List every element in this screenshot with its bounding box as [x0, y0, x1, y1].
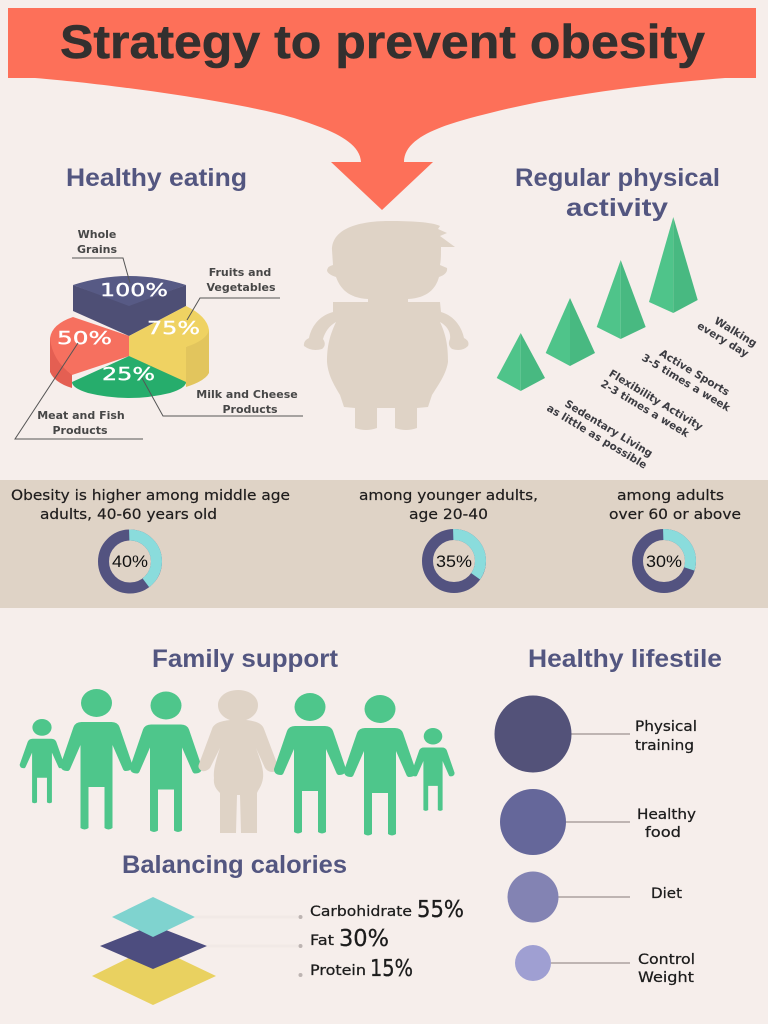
pyramid chart: physical activity	[497, 217, 759, 472]
donut: 40%: 40%	[112, 552, 148, 571]
banner arrow	[8, 8, 756, 210]
leader lines	[15, 258, 303, 439]
layered diamonds	[92, 897, 302, 1005]
label: active sports: Active Sports	[657, 347, 731, 399]
layer: protein	[92, 946, 216, 1005]
heading: healthy lifestile: Healthy lifestile	[528, 645, 722, 673]
pie value labels	[57, 280, 200, 385]
slice: meat and fish 50%	[50, 317, 129, 388]
label: sedentary living: as little as possible	[544, 402, 649, 472]
legend: fat: Fat	[310, 933, 335, 949]
heading: family support: Family support	[152, 645, 339, 673]
item: control weight: Control	[638, 952, 695, 968]
text: younger adults: among younger adults,	[359, 488, 538, 504]
heading: regular physical activity: activity	[566, 194, 668, 222]
label: meat and fish: Meat and Fish	[37, 409, 125, 422]
lifestyle chart	[494, 696, 697, 986]
figure: child left	[20, 719, 64, 803]
figure: overweight person	[198, 690, 278, 833]
heading: regular physical activity: Regular physical	[515, 164, 720, 192]
item: control weight	[515, 945, 695, 986]
text: middle age: adults, 40-60 years old	[40, 507, 217, 523]
label: flexibility activity: Flexibility Activity	[607, 368, 705, 433]
label: meat and fish: Products	[52, 424, 108, 437]
title: Strategy to prevent obesity	[60, 15, 705, 68]
label: milk and cheese: Products	[222, 403, 278, 416]
item: diet	[508, 872, 682, 922]
label: flexibility activity: 2-3 times a week	[598, 378, 692, 441]
pyramid: walking	[649, 217, 698, 313]
donut: 30%: 30%	[646, 552, 682, 571]
label: fruits and vegetables: Vegetables	[206, 281, 276, 294]
text: younger adults: age 20-40	[409, 507, 488, 523]
pie value labels: 50%	[57, 328, 112, 349]
band: age statistics	[0, 480, 768, 608]
donut: 35%: 35%	[436, 552, 472, 571]
donut: 40%	[104, 535, 156, 588]
figure: child right	[411, 728, 455, 811]
donut: 35%	[428, 534, 480, 588]
label: walking: Walking	[712, 315, 759, 350]
item: healthy food: food	[645, 825, 681, 841]
heading: healthy eating: Healthy eating	[66, 164, 247, 192]
heading: balancing calories: Balancing calories	[122, 851, 347, 879]
figure: adult 2	[130, 692, 202, 832]
slice: milk and cheese 25%	[72, 356, 186, 398]
item: physical training	[494, 696, 697, 772]
family illustration	[20, 689, 455, 836]
label: whole grains: Grains	[77, 243, 117, 256]
bullet dots	[298, 915, 302, 977]
layer: carbohydrate	[112, 897, 195, 937]
slice: fruits and vegetables 75%	[129, 306, 209, 387]
label: whole grains: Whole	[78, 228, 116, 241]
pie chart: healthy eating	[15, 228, 303, 439]
text: over 60: over 60 or above	[609, 507, 741, 523]
legend: protein: Protein	[310, 963, 366, 979]
figure: adult 4	[344, 695, 416, 836]
item: healthy food	[500, 789, 696, 855]
calorie legend	[310, 897, 464, 982]
text: over 60: among adults	[617, 488, 724, 504]
pie value labels: 25%	[102, 364, 155, 385]
label: sedentary living: Sedentary Living	[562, 398, 655, 460]
item: physical training: training	[635, 738, 694, 754]
pyramid: sedentary living	[497, 333, 545, 391]
item: control weight: Weight	[638, 970, 694, 986]
label: active sports: 3-5 times a week	[639, 352, 733, 415]
label: walking: every day	[695, 320, 751, 360]
item: physical training: Physical	[635, 719, 697, 735]
legend: fat: 30%	[339, 926, 389, 952]
legend: carbohidrate: Carbohidrate	[310, 904, 412, 920]
pie value labels: 75%	[147, 318, 200, 339]
donut: 30%	[638, 534, 690, 588]
text: middle age: Obesity is higher among middle age	[11, 488, 290, 504]
item: diet: Diet	[651, 886, 682, 902]
layer: fat	[100, 925, 207, 969]
pie value labels: 100%	[100, 280, 168, 301]
legend: carbohidrate: 55%	[417, 897, 464, 923]
label: milk and cheese: Milk and Cheese	[196, 388, 298, 401]
pyramid: active sports	[597, 260, 646, 339]
figure: adult 3	[274, 693, 346, 834]
slice: whole grains 100%	[73, 276, 186, 336]
legend: protein: 15%	[370, 956, 413, 982]
figure: adult 1	[60, 689, 132, 830]
icon: obese person silhouette	[304, 221, 468, 430]
pyramid: flexibility activity	[546, 298, 595, 366]
faint connector lines	[195, 917, 298, 946]
item: healthy food: Healthy	[637, 807, 696, 823]
label: fruits and vegetables: Fruits and	[209, 266, 271, 279]
